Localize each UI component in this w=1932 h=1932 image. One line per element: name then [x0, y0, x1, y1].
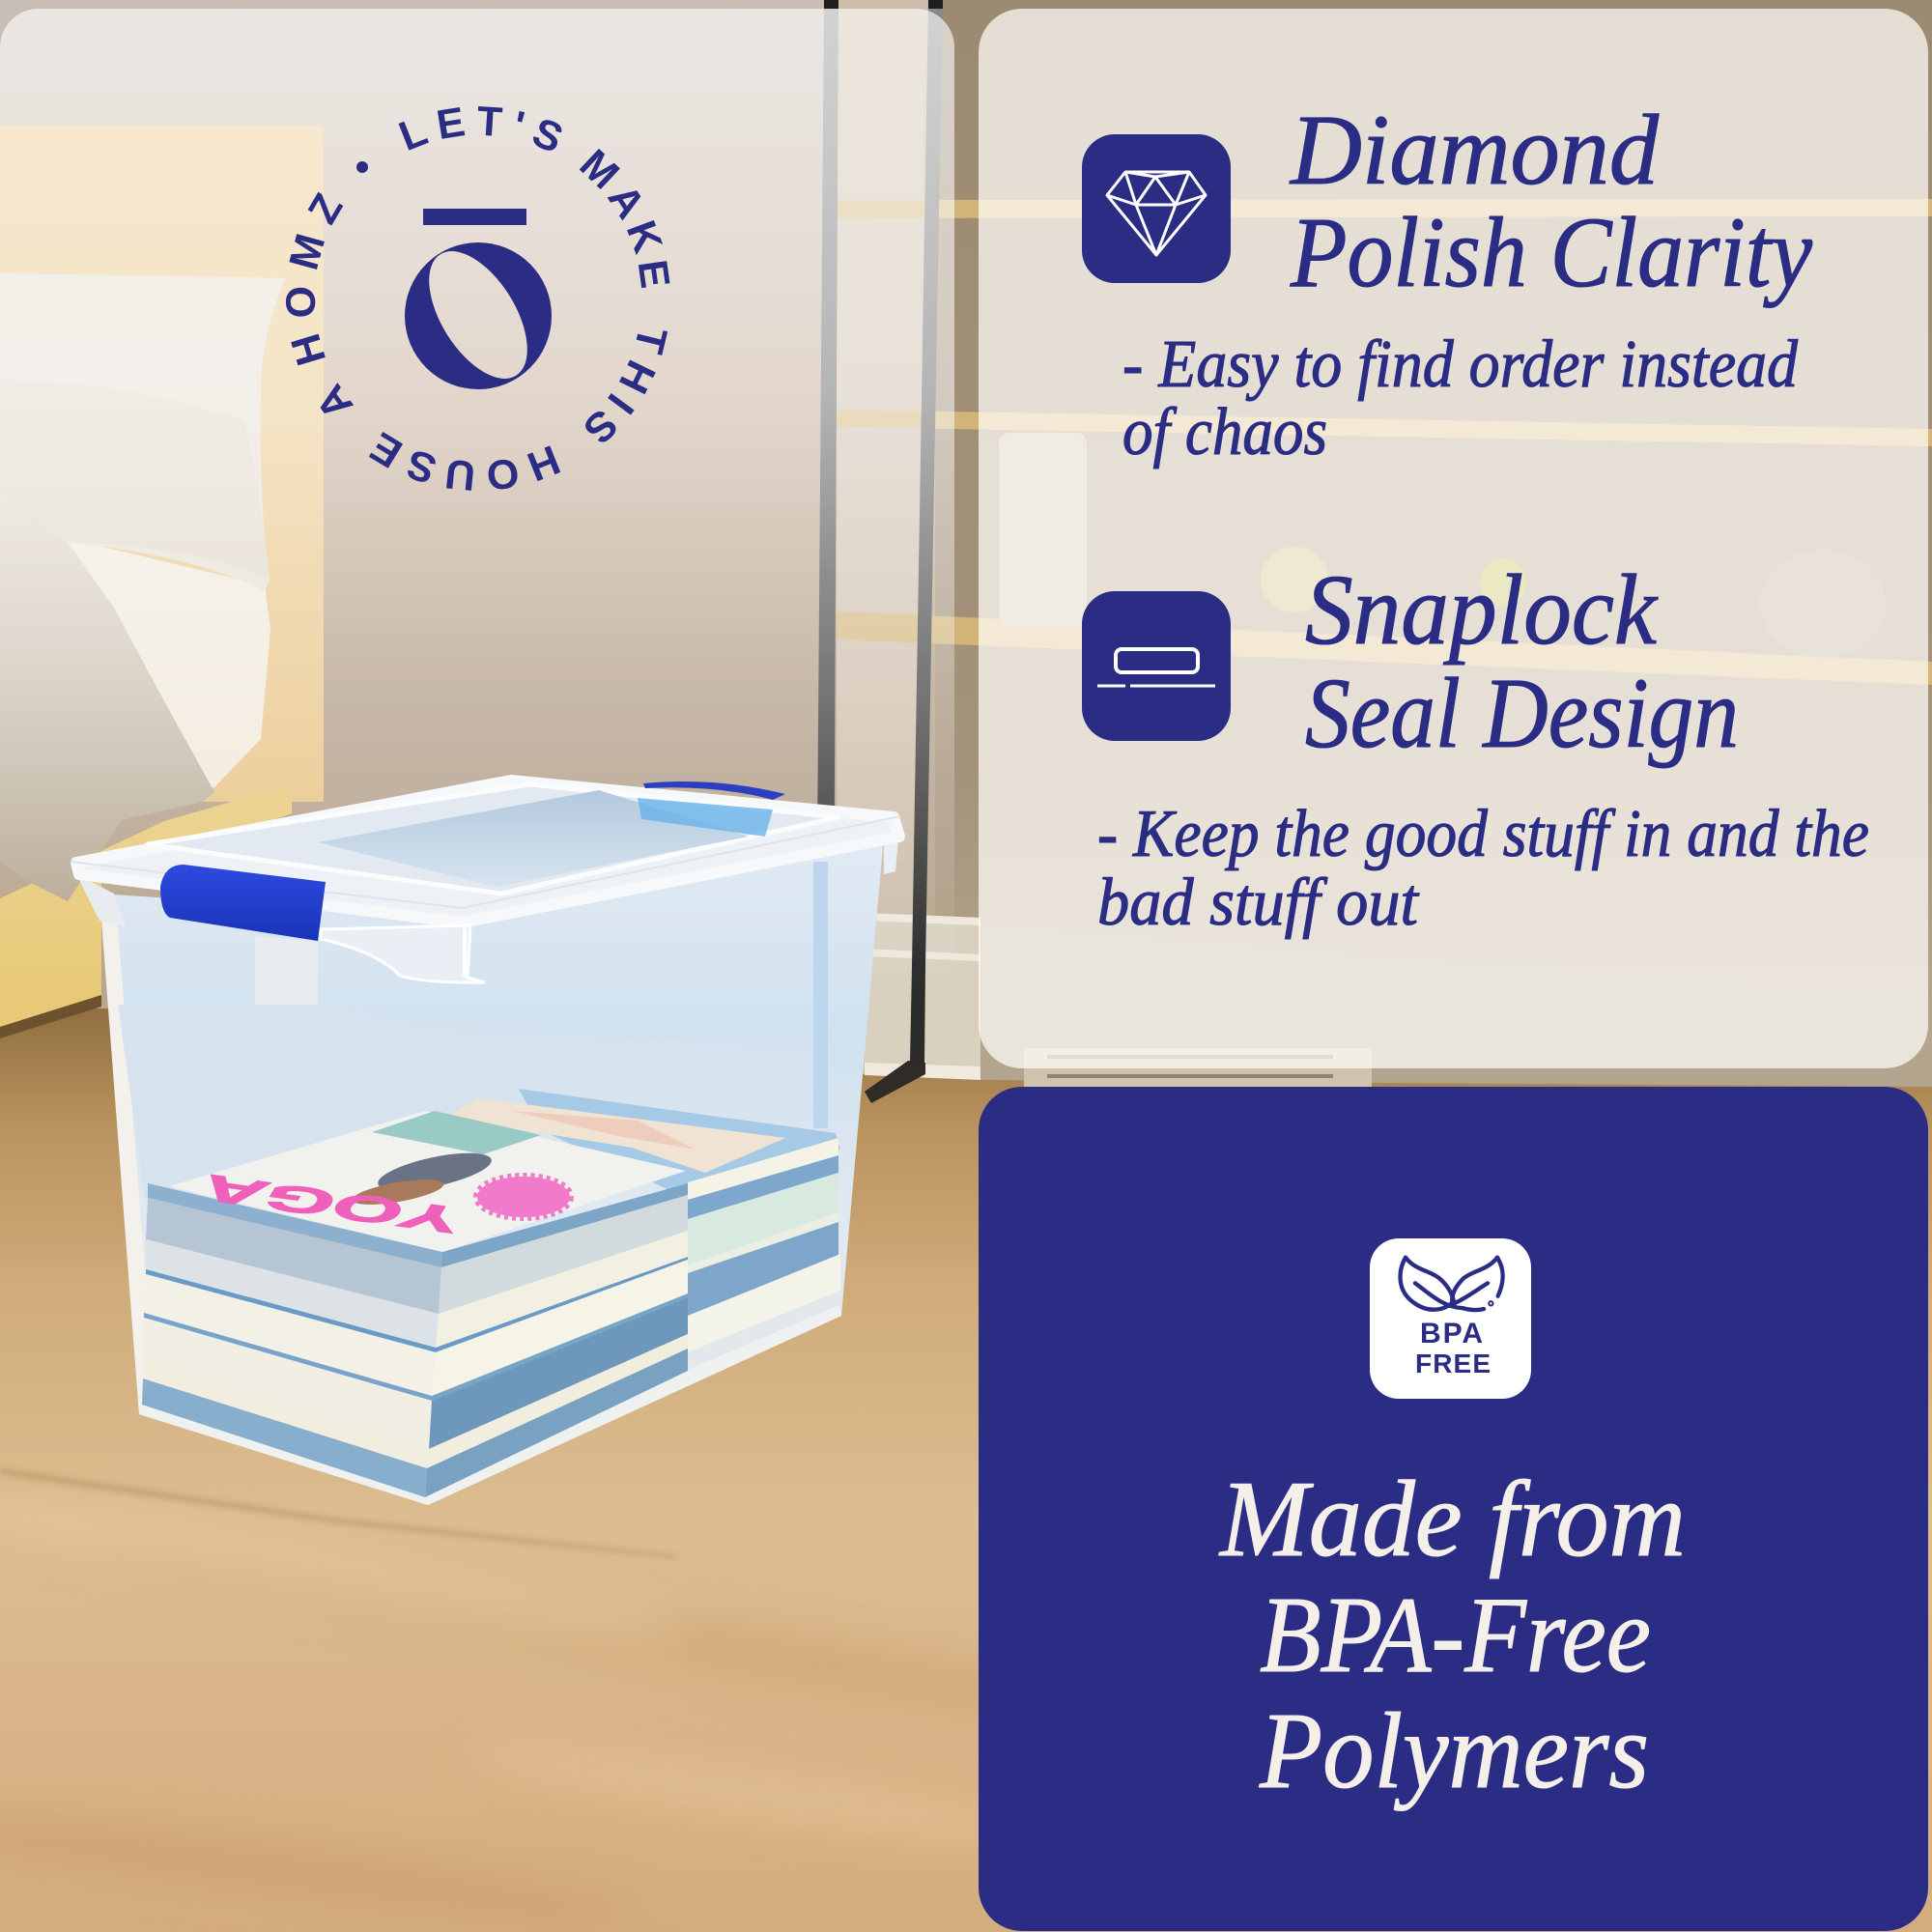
panel: BPA free navy — [979, 1087, 1928, 1931]
front book stack — [142, 1111, 688, 1497]
heading: made from BPA-free polymers — [1218, 1460, 1686, 1811]
logo: round badge — [286, 106, 670, 491]
panel: features translucent — [979, 9, 1928, 1068]
feature 1: diamond polish clarity — [1082, 95, 1813, 469]
heading: Polish Clarity — [1290, 197, 1813, 308]
logo ring text: MAKE — [580, 149, 670, 288]
icon: BPA free badge: FREE — [1415, 1349, 1491, 1378]
lid catch — [321, 925, 485, 982]
icon: diamond — [1082, 134, 1231, 283]
description: - Easy to find order instead — [1122, 327, 1799, 402]
panel: top-left translucent logo panel — [0, 9, 954, 1068]
feature 2: snaplock seal design — [1082, 554, 1869, 940]
box body — [99, 836, 884, 1505]
heading: Diamond — [1289, 95, 1660, 206]
description: of chaos — [1122, 395, 1327, 469]
product: clear storage box with books — [71, 781, 900, 1505]
description: bad stuff out — [1097, 866, 1419, 940]
icon: BPA free badge: BPA — [1420, 1318, 1483, 1350]
logo ring text: HOUSE — [369, 432, 560, 491]
logo ring text: LET'S — [398, 106, 562, 151]
heading: made from BPA-free polymers: Polymers — [1259, 1691, 1649, 1811]
description — [1097, 797, 1869, 940]
description — [1122, 327, 1799, 469]
logo ring text: HOMZ — [286, 191, 344, 365]
description: - Keep the good stuff in and the — [1097, 797, 1869, 871]
back handle — [643, 781, 785, 800]
logo mark — [405, 209, 552, 389]
heading — [1305, 554, 1739, 769]
box lid — [71, 781, 900, 982]
front blue handle — [160, 865, 326, 941]
logo ring text: A — [321, 383, 354, 413]
rear book stack — [445, 1089, 841, 1370]
heading — [1289, 95, 1813, 308]
icon: snaplock — [1082, 591, 1231, 741]
magazine cover: YOGA — [191, 1167, 472, 1240]
heading: Snaplock — [1305, 554, 1659, 666]
heading: made from BPA-free polymers: Made from — [1218, 1460, 1686, 1579]
icon: BPA free badge — [1370, 1238, 1531, 1399]
heading: Seal Design — [1305, 658, 1739, 769]
heading: made from BPA-free polymers: BPA-Free — [1260, 1576, 1651, 1695]
magazine cover — [169, 1111, 686, 1252]
logo ring text: THIS — [585, 330, 668, 442]
logo ring text — [286, 106, 670, 491]
